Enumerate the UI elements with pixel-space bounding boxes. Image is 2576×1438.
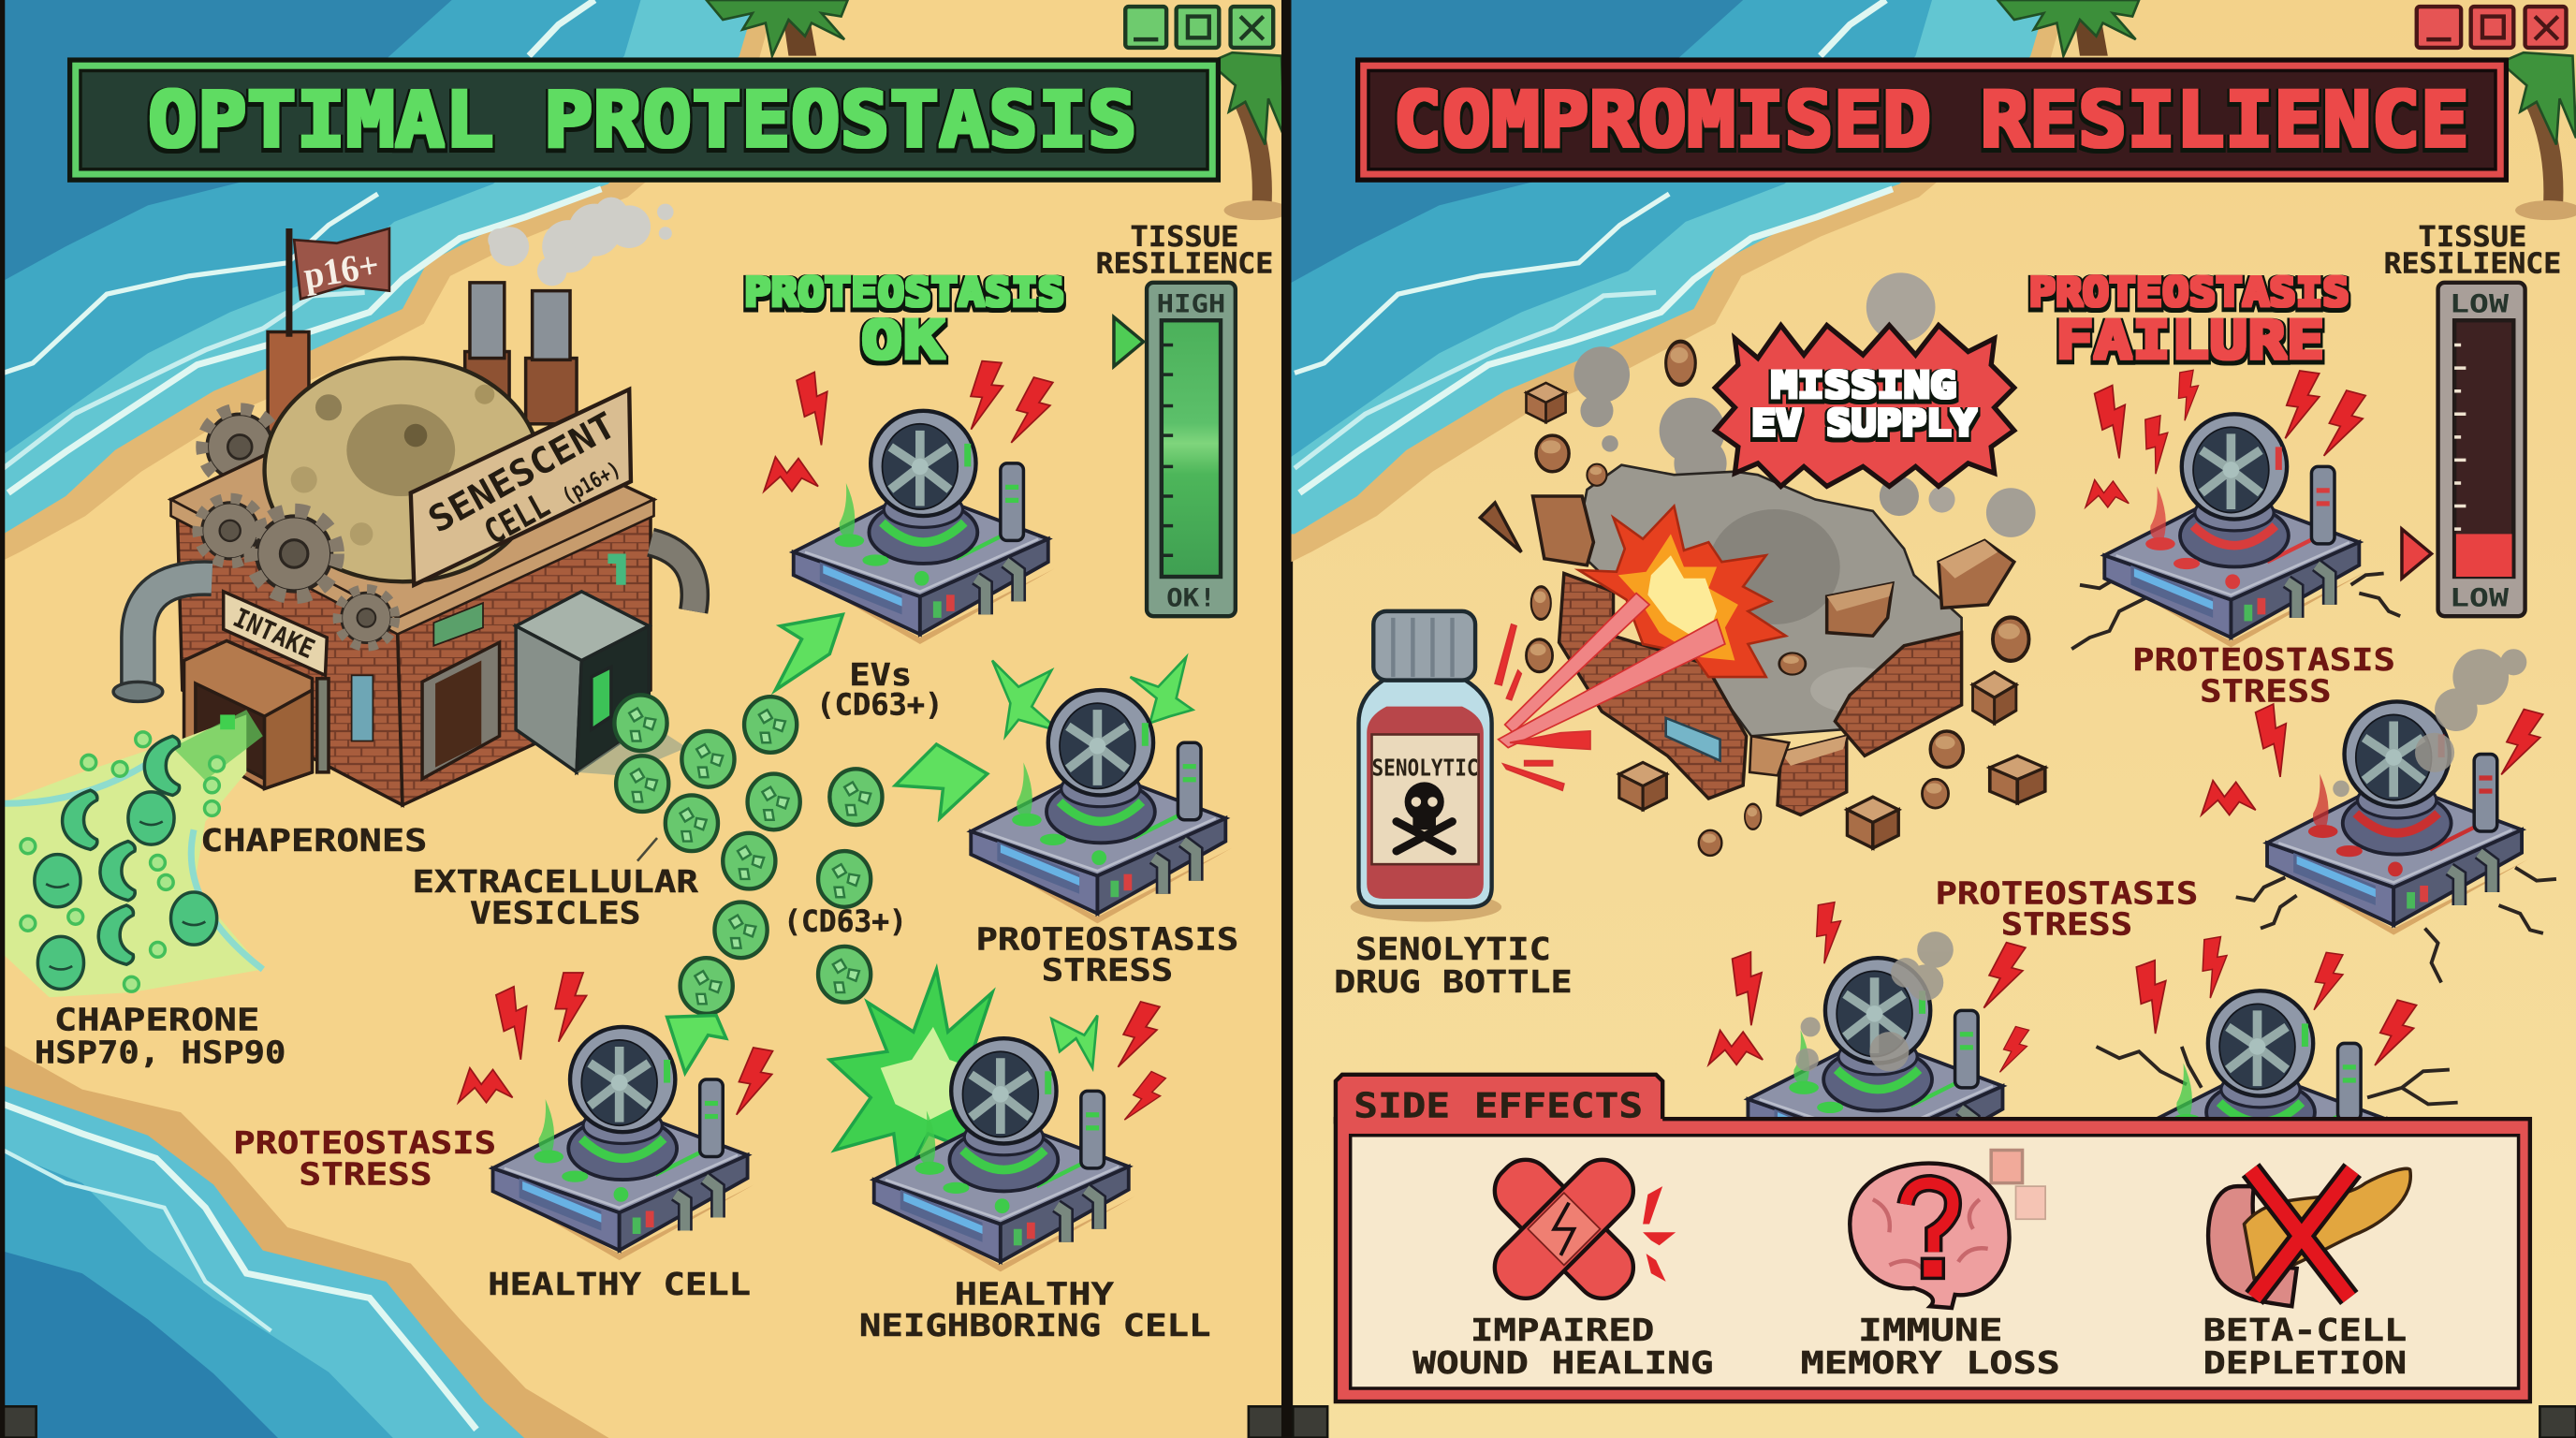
machine door: [516, 592, 649, 772]
rubble mound: [1575, 465, 1962, 736]
label: senolytic drug bottle: DRUG BOTTLE: [1334, 963, 1573, 1000]
label: evs cd63: [816, 656, 943, 722]
label: healthy neighboring cell: [859, 1275, 1211, 1343]
label: chaperone hsp70 hsp90: [35, 1001, 285, 1071]
dark door: [422, 642, 500, 779]
ruined building: [1480, 465, 2014, 814]
label: beta-cell depletion: DEPLETION: [2203, 1344, 2407, 1381]
machine smoke: [1795, 649, 2526, 1071]
machine: healthy neighboring cell: [869, 1038, 1135, 1271]
ocean: top left: [0, 0, 775, 562]
cracks: [2071, 574, 2556, 1104]
label: proteostasis stress, upper right: [2132, 641, 2395, 709]
divider: [1281, 0, 1293, 1438]
label: beta-cell depletion: BETA-CELL: [2203, 1312, 2407, 1348]
smoke: [488, 198, 674, 286]
intake pipe: [113, 579, 212, 701]
label: tissue resilience: TISSUE: [1131, 221, 1238, 254]
palm trees: [707, 0, 1290, 220]
gauge: tissue resilience high: HIGH: [1157, 290, 1225, 318]
label: beta-cell depletion: [2203, 1312, 2407, 1381]
brick walls: [178, 520, 402, 805]
flag p16+: p16+: [300, 243, 382, 297]
chimneys: [268, 283, 577, 447]
right pipe: [651, 542, 695, 611]
burst: missing ev supply: [1715, 325, 2014, 486]
label: impaired wound healing: [1412, 1312, 1714, 1381]
door shadow: [577, 723, 687, 775]
small panels: [433, 603, 483, 646]
center block: [1778, 736, 1847, 814]
label: impaired wound healing: IMPAIRED: [1471, 1312, 1654, 1348]
label: evs cd63: (CD63+): [816, 688, 943, 722]
label: chaperone hsp70 hsp90: HSP70, HSP90: [35, 1034, 285, 1071]
gauge: tissue resilience low: LOW: [2450, 290, 2509, 318]
roof: [171, 386, 654, 631]
window buttons: [1125, 7, 1273, 48]
debris: [1526, 342, 2045, 856]
label: immune memory loss: MEMORY LOSS: [1801, 1344, 2060, 1381]
icon: broken bandage: [1484, 1149, 1676, 1309]
machine: cracked lower: [2126, 990, 2392, 1224]
label: immune memory loss: IMMUNE: [1858, 1312, 2002, 1348]
title banner red: COMPROMISED RESILIENCE: [1393, 77, 2469, 165]
machine: top stress cell: [788, 411, 1055, 644]
panel: compromised resilience: [1292, 0, 2576, 1438]
label: tissue resilience right: TISSUE: [2419, 221, 2526, 254]
machine: smoking lower: [1743, 958, 2009, 1191]
icon: skull and crossbones: [1397, 782, 1453, 851]
sign: intake: INTAKE: [228, 602, 319, 665]
label: healthy neighboring cell: HEALTHY: [955, 1275, 1114, 1312]
back gear: [202, 409, 278, 485]
label: proteostasis stress, left: PROTEOSTASIS: [233, 1124, 496, 1161]
intake door: [184, 640, 329, 788]
title banner red: [1355, 57, 2509, 183]
side effects tab: SIDE EFFECTS: [1354, 1085, 1643, 1125]
senolytic beams: [1495, 594, 1725, 790]
status: proteostasis ok: PROTEOSTASIS: [744, 269, 1064, 315]
status: proteostasis failure: FAILURE: [2056, 311, 2324, 372]
extracellular vesicles: [614, 695, 882, 1014]
label: proteostasis stress, center: STRESS: [2001, 906, 2132, 943]
label: extracellular vesicles: VESICLES: [470, 894, 640, 931]
window buttons red: [2417, 7, 2566, 48]
label: extracellular vesicles: [413, 863, 699, 931]
icon: brain with question mark: [1850, 1151, 2045, 1308]
sign: senescent cell: [411, 389, 631, 585]
label: impaired wound healing: WOUND HEALING: [1412, 1344, 1714, 1381]
label: proteostasis stress, upper right: STRESS: [2200, 672, 2331, 709]
label: evs cd63: EVs: [849, 656, 912, 693]
label: proteostasis stress, right: [976, 920, 1238, 989]
factory: senescent cell: [113, 198, 695, 805]
upper right block: [1939, 540, 2014, 608]
panel: optimal proteostasis: [0, 0, 1290, 1438]
ocean: top right: [1292, 0, 2067, 562]
title banner: OPTIMAL PROTEOSTASIS: [148, 77, 1137, 165]
stress bolts: [459, 360, 1168, 1129]
green arrows: [667, 614, 988, 1073]
senolytic drug bottle: SENOLYTIC: [1372, 754, 1479, 781]
label: tissue resilience: RESILIENCE: [1096, 247, 1273, 280]
label: extracellular vesicles: EXTRACELLULAR: [413, 863, 699, 900]
sign: senescent cell: SENESCENT: [421, 404, 623, 542]
cell dome: [265, 359, 540, 581]
failure bolts: [1708, 370, 2546, 1078]
title banner: [67, 57, 1221, 183]
label: chaperone hsp70 hsp90: CHAPERONE: [54, 1001, 259, 1037]
label: tissue resilience: [1096, 221, 1273, 280]
machine: damaged right: [2262, 701, 2528, 935]
label: senolytic drug bottle: SENOLYTIC: [1355, 931, 1551, 967]
blue panel: [1666, 718, 1720, 761]
label: proteostasis stress, center: PROTEOSTASIS: [1936, 874, 2198, 911]
status: proteostasis ok: OK: [861, 311, 944, 372]
label: proteostasis stress, upper right: PROTEOSTASIS: [2132, 641, 2395, 678]
explosion: [1579, 506, 1786, 677]
green spark bursts: [992, 657, 1193, 1068]
ocean: bottom left: [0, 1043, 611, 1438]
corner brackets right panel: [1293, 1406, 2576, 1438]
label: immune memory loss: [1801, 1312, 2060, 1381]
burst: missing ev supply: EV SUPPLY: [1751, 403, 1977, 445]
gauge: tissue resilience low: [2402, 283, 2525, 616]
machine: failing top: [2100, 414, 2365, 647]
right wall: [1835, 633, 1962, 756]
big green burst: [829, 969, 1018, 1186]
label: cd63: (CD63+): [783, 905, 907, 939]
label: chaperones: CHAPERONES: [200, 822, 427, 858]
machine: healthy cell: [488, 1027, 754, 1260]
flag p16+: [289, 228, 389, 337]
icon: pancreas with x: [2208, 1168, 2410, 1306]
gauge: tissue resilience high: OK!: [1166, 585, 1216, 613]
label: proteostasis stress, center: [1936, 874, 2198, 943]
side effects tab: [1336, 1075, 1662, 1125]
gears: [198, 498, 262, 564]
label: tissue resilience right: RESILIENCE: [2384, 247, 2561, 280]
label: healthy neighboring cell: NEIGHBORING CELL: [859, 1307, 1211, 1343]
left chunk: [1533, 496, 1593, 565]
senolytic drug bottle: [1351, 611, 1501, 922]
label: proteostasis stress, right: STRESS: [1042, 952, 1173, 989]
palm trees right: [1998, 0, 2576, 220]
burst: missing ev supply: MISSING: [1771, 365, 1956, 407]
status: proteostasis ok: [744, 269, 1064, 372]
label: senolytic drug bottle: [1334, 931, 1573, 1000]
gauge: tissue resilience low: LOW: [2450, 585, 2509, 613]
label: healthy cell: HEALTHY CELL: [488, 1266, 751, 1302]
corner brackets left panel: [0, 1406, 1283, 1438]
label: proteostasis stress, left: [233, 1124, 496, 1192]
chaperone release cloud: [0, 710, 263, 997]
label: tissue resilience right: [2384, 221, 2561, 280]
machine: proteostasis stress cell: [966, 690, 1232, 923]
sign: senescent cell: CELL (p16+): [477, 446, 626, 552]
label: proteostasis stress, left: STRESS: [299, 1155, 432, 1192]
gauge: tissue resilience high: [1114, 283, 1236, 616]
status: proteostasis failure: [2029, 269, 2349, 372]
left wall: [1559, 574, 1747, 799]
status: proteostasis failure: PROTEOSTASIS: [2029, 269, 2349, 315]
chaperone proteins: [21, 732, 225, 991]
green tube: [607, 559, 621, 585]
label: proteostasis stress, right: PROTEOSTASIS: [976, 920, 1238, 957]
big cube: [1827, 583, 1893, 636]
smoke clouds: [1573, 272, 2036, 537]
panel: side effects: [1336, 1075, 2530, 1401]
